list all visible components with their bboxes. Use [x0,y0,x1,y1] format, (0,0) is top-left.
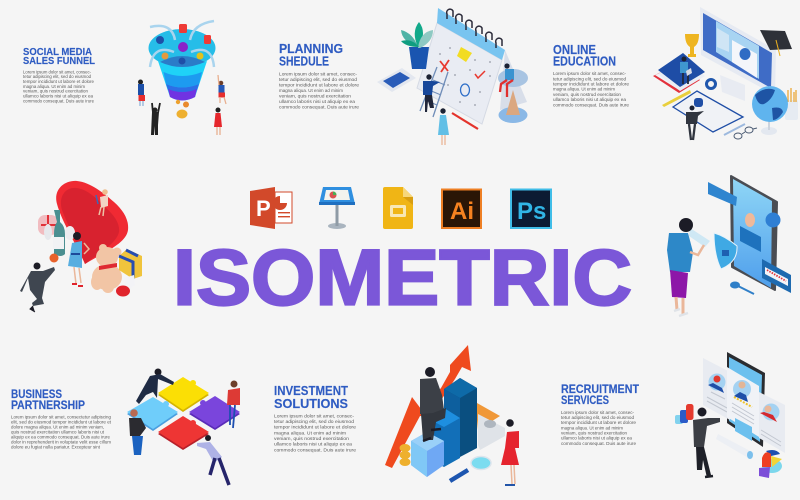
body text [561,410,636,446]
glasses [734,127,757,139]
body text: quis nostrud exercitation ullamco laboris nisi ut [11,430,105,434]
recruitment illustration [675,352,785,478]
puzzle illustration [127,368,240,485]
money stack [477,403,505,450]
body text: Lorem ipsum dolor sit amet, consectetur adipiscing [11,414,111,420]
body text: commodo consequat. Duis aute irure [23,98,94,104]
body text: tetur adipiscing elit, sed do eiusmod [274,419,354,424]
body text: dolore magna aliqua. Ut enim ad minim veniam, [11,424,104,430]
body text [279,72,359,110]
body text: tetur adipiscing elit, sed do eiusmod [279,77,357,82]
icon: PowerPoint [250,187,292,229]
body text [23,69,94,104]
body text: Lorem ipsum dolor sit amet, consec- [274,413,354,418]
heading [553,43,616,68]
woman right [227,380,240,428]
puzzle piece: purple [189,396,240,430]
body text: veniam, quis nostrud exercitation [23,89,88,94]
verified badge [766,212,780,228]
icon: Keynote [319,187,355,229]
body text: ullamco laboris nisi ut aliquip ex ea [553,97,626,102]
heading: SOCIAL MEDIA [23,46,92,58]
icon: Photoshop [510,188,552,229]
heading [279,42,343,68]
candidate card center [727,367,759,437]
body text: veniam, quis nostrud exercitation [274,436,349,441]
candidate card right [759,392,785,453]
heading: EDUCATION [553,54,616,68]
shield [714,233,737,269]
icon: Google Slides [383,187,413,229]
heading: SALES FUNNEL [23,55,96,67]
body text: ullamco laboris nisi ut aliquip ex ea [561,436,632,441]
body text: ullamco laboris nisi ut aliquip ex ea [274,442,352,447]
panel: social media sales funnel [23,21,226,135]
puzzle piece: blue [127,397,178,431]
open book [673,91,743,132]
heart [56,181,128,264]
icon: PowerPoint: P [256,196,271,221]
body text: dolor in reprehenderit in voluptate velit esse cillum [11,440,111,444]
heading: INVESTMENT [274,384,348,398]
body text: ullamco laboris nisi ut aliquip ex ea [23,94,93,98]
smartphone [727,352,765,447]
heading [11,389,85,412]
panel: phone security illustration [667,176,791,316]
body text [274,413,356,452]
icon: Illustrator [441,188,482,229]
body text: Lorem ipsum dolor sit amet, consec- [561,410,634,415]
body text: elit, sed do eiusmod tempor incididunt ut labore et [11,420,112,424]
main title: ISOMETRIC: ISOMETRIC [173,232,632,322]
standing man [686,106,704,140]
panel: investment solutions [274,345,519,485]
pie chart [759,450,782,478]
cupid [96,189,108,216]
body text: tetur adipiscing elit, sed do eiusmod [553,76,626,81]
funnel illustration [138,21,226,135]
body text: Lorem ipsum dolor sit amet, consec- [553,71,626,76]
graduation cap [760,30,792,56]
gift boxes and ring [116,249,142,296]
body text: veniam, quis nostrud exercitation [553,92,621,97]
body text: tempor incididunt ut labore et dolore [274,425,356,430]
scroll [716,434,754,459]
monitor [700,7,776,101]
panel: planning schedule [279,8,528,145]
growth chart illustration [385,345,519,485]
body text: dolore eu fugiat nulla pariatur. Excepteur sint [11,444,101,450]
panel: recruitment services [561,352,785,478]
password card [762,259,791,293]
software icons row [250,187,552,229]
candidate card left [703,358,730,420]
person left [129,409,146,455]
chat badge [694,98,703,107]
body text: aliquip ex ea commodo consequat. Duis aute irure [11,434,110,440]
small cylinder chart [675,404,694,424]
woman with tablet [501,419,519,485]
body text: magna aliqua. Ut enim ad minim [23,84,85,89]
heading: SOLUTIONS [274,397,348,411]
magnifier [450,456,491,481]
heading: BUSINESS [11,389,62,401]
coins [176,100,189,118]
education illustration [653,7,798,140]
rising arrow [385,345,471,468]
gear [706,80,716,88]
body text: tempor incididunt ut labore et dolore [553,82,629,86]
heading: SERVICES [561,395,609,407]
plant [401,22,433,69]
heading: RECRUITMENT [561,384,639,396]
body text: commodo consequat. Duis aute irure [274,448,356,452]
businessman climbing [420,367,446,441]
body text: Lorem ipsum dolor sit amet, consec- [279,72,357,76]
panel: online education [553,7,798,140]
woman with pencil [438,108,478,145]
chart bars [411,378,477,477]
businessman [693,408,720,478]
people around funnel [138,75,226,135]
calendar illustration [377,8,528,145]
body text: tempor incididunt ut labore et dolore [561,420,636,425]
hourglass with seated man [498,63,528,123]
body text: ullamco laboris nisi ut aliquip ex ea [279,99,355,104]
body text: veniam, quis nostrud exercitation [279,94,351,98]
key [730,282,754,294]
icon: Photoshop: Ps [517,198,546,225]
chat card [708,182,737,206]
body text [11,414,112,450]
smartphone with face scan [731,176,777,290]
heading [561,384,639,407]
trophy [685,34,699,57]
panel: heart and gifts illustration [20,181,142,312]
woman [68,232,89,286]
heading: PARTNERSHIP [11,400,85,412]
body text: tetur adipiscing elit, sed do eiusmod [561,415,634,420]
puzzle piece: red [158,416,209,450]
body text: magna aliqua. Ut enim ad minim [274,430,346,435]
calculator [377,68,416,92]
puzzle piece: yellow [158,377,209,412]
ladder and climber [420,67,448,117]
coins [400,444,410,466]
heading [274,384,348,411]
body text: tempor incididunt ut labore et dolore [279,83,359,88]
body text: commodo consequat. Duis aute irure [553,102,629,108]
icon: Illustrator: Ai [450,198,474,225]
person holding phone [667,218,710,316]
panel: business partnership [11,368,240,485]
heading: SHEDULE [279,54,329,68]
body text: tempor incididunt ut labore et dolore [23,79,94,84]
heading: ONLINE [553,43,596,57]
body text: magna aliqua. Ut enim ad minim [279,88,343,93]
body text [553,71,629,108]
ruler [662,90,691,107]
body text: magna aliqua. Ut enim ad minim [553,87,615,92]
teddy bear [91,244,122,293]
body text: magna aliqua. Ut enim ad minim [561,425,623,430]
man pushing [197,435,229,485]
stack of books with reader [653,53,705,93]
man with bouquet [20,254,58,312]
heading [23,46,96,67]
body text: veniam, quis nostrud exercitation [561,430,627,436]
globe with pencil cup [752,86,798,135]
gift box and champagne [38,210,75,256]
body text: tetur adipiscing elit, sed do eiusmod [23,74,91,79]
heading: PLANNING [279,42,343,56]
body text: commodo consequat. Duis aute irure [279,104,359,110]
top businessman [136,368,174,404]
body text: commodo consequat. Duis aute irure [561,441,636,446]
body text: Lorem ipsum dolor sit amet, consec- [23,69,91,74]
